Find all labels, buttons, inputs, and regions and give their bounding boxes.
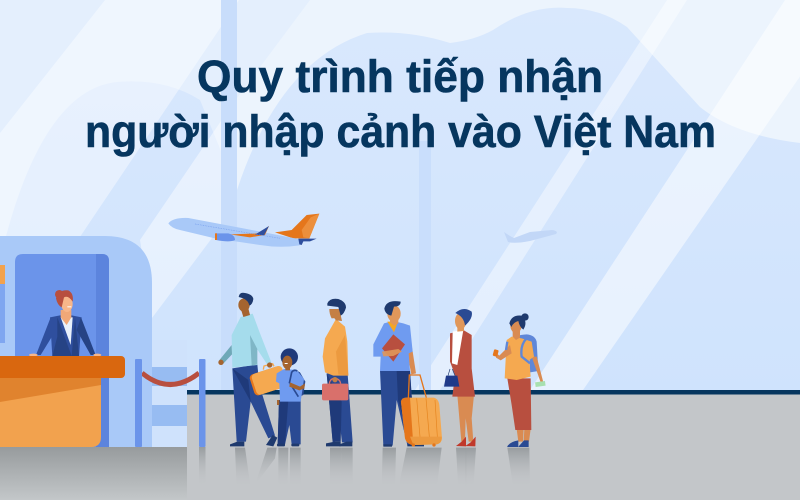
floor <box>0 390 800 500</box>
traveller: woman with backpack <box>493 313 546 447</box>
title: người nhập cảnh vào Việt Nam <box>85 106 716 157</box>
traveller: man in light blue shirt <box>218 293 277 446</box>
title <box>85 51 716 157</box>
handbag: navy <box>444 369 459 387</box>
traveller: man in orange sweater <box>322 299 353 446</box>
title: Quy trình tiếp nhận <box>197 51 603 102</box>
suitcase: orange carry-on <box>249 362 288 396</box>
handbag: red <box>322 377 348 400</box>
airplane <box>168 214 319 247</box>
desk <box>0 378 101 447</box>
pillar right <box>419 141 431 391</box>
people reflections right <box>382 448 530 488</box>
check-in booth <box>0 236 152 447</box>
distant airplane <box>504 230 557 243</box>
queue barrier background panels <box>152 367 187 426</box>
rope barrier <box>135 359 206 487</box>
traveller: man with folder <box>373 301 424 447</box>
immigration officer <box>29 290 101 357</box>
people reflections left <box>235 448 353 488</box>
suitcase: large orange roller <box>401 375 442 447</box>
pillar left <box>221 0 237 392</box>
traveller: woman in red dress <box>444 309 476 446</box>
traveller: child with backpack <box>276 348 305 446</box>
